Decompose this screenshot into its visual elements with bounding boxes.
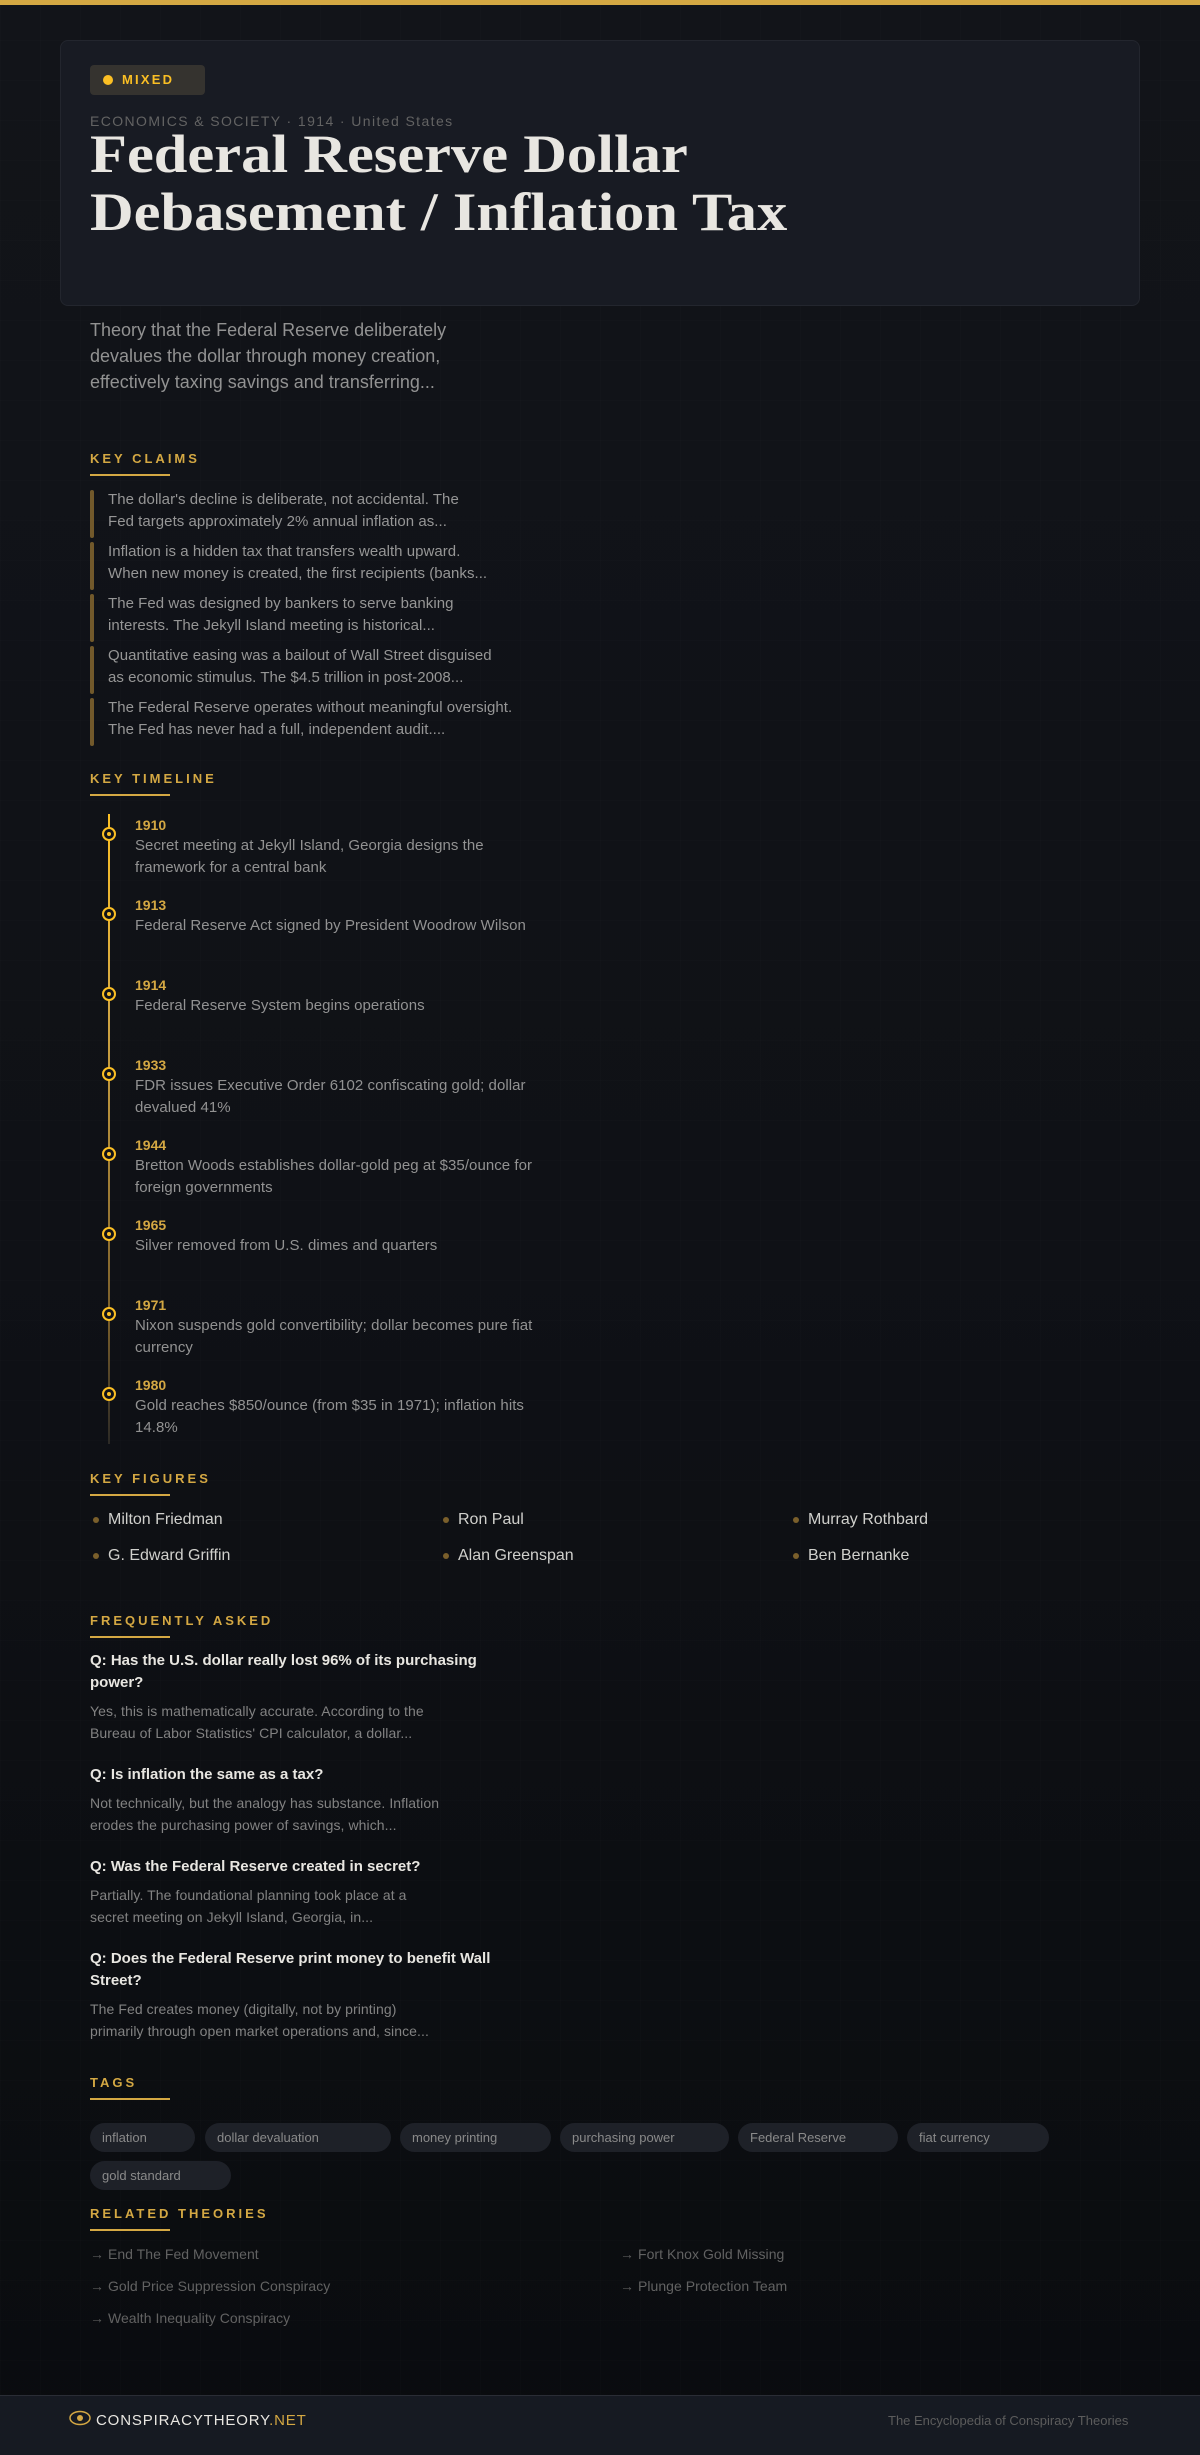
FAQ item 1: Yes, this is mathematically accurate. According to the	[90, 1703, 424, 1719]
event 1944	[102, 1137, 532, 1196]
title: Federal Reserve Dollar	[90, 124, 688, 184]
event 1980: 14.8%	[135, 1419, 178, 1436]
claim 5: The Federal Reserve operates without meaningful oversight.	[108, 699, 512, 716]
tag	[90, 2123, 195, 2152]
claim 1: The dollar's decline is deliberate, not accidental. The	[108, 491, 459, 508]
FAQ item 2	[90, 1766, 439, 1833]
footer tagline: The Encyclopedia of Conspiracy Theories	[888, 2413, 1128, 2428]
tag: Federal Reserve	[750, 2130, 846, 2145]
event 1980: Gold reaches $850/ounce (from $35 in 1971); inflation hits	[135, 1397, 524, 1414]
panel: hero header	[60, 40, 1140, 306]
tag: dollar devaluation	[217, 2130, 319, 2145]
FAQ item 3: Q: Was the Federal Reserve created in secret?	[90, 1858, 420, 1875]
event 1971	[102, 1297, 532, 1356]
event 1913: 1913	[135, 897, 166, 913]
figure: Ben Bernanke: Ben Bernanke	[808, 1547, 909, 1564]
event 1933: FDR issues Executive Order 6102 confiscating gold; dollar	[135, 1077, 526, 1094]
FAQ item 1	[90, 1652, 477, 1741]
event 1965: 1965	[135, 1217, 166, 1233]
claim 5: The Fed has never had a full, independent audit....	[108, 721, 445, 738]
heading: related theories: RELATED THEORIES	[90, 2206, 268, 2221]
event 1980	[102, 1377, 524, 1436]
claim 2: Inflation is a hidden tax that transfers wealth upward.	[108, 543, 460, 560]
FAQ item 2: Q: Is inflation the same as a tax?	[90, 1766, 323, 1783]
FAQ item 3: secret meeting on Jekyll Island, Georgia, in...	[90, 1909, 373, 1925]
footer	[0, 2395, 1200, 2455]
heading: key claims: KEY CLAIMS	[90, 451, 200, 466]
tag	[738, 2123, 898, 2152]
title	[90, 124, 787, 242]
event 1913	[102, 897, 526, 934]
tag	[560, 2123, 729, 2152]
FAQ item 4: primarily through open market operations and, since...	[90, 2023, 429, 2039]
figure: Alan Greenspan: Alan Greenspan	[458, 1547, 574, 1564]
claim 3: interests. The Jekyll Island meeting is historical...	[108, 617, 435, 634]
timeline	[102, 814, 532, 1444]
badge: mixed verdict	[90, 65, 205, 95]
tag: money printing	[412, 2130, 497, 2145]
top accent bar	[0, 0, 1200, 5]
claim 4	[90, 646, 492, 694]
event 1914: Federal Reserve System begins operations	[135, 997, 425, 1014]
FAQ item 4: The Fed creates money (digitally, not by printing)	[90, 2001, 396, 2017]
summary text: devalues the dollar through money creation,	[90, 346, 440, 366]
event 1913: Federal Reserve Act signed by President Woodrow Wilson	[135, 917, 526, 934]
tag	[400, 2123, 551, 2152]
brand name: CONSPIRACYTHEORY.NET	[96, 2412, 307, 2429]
tag: inflation	[102, 2130, 147, 2145]
claim 1	[90, 490, 459, 538]
figure: Murray Rothbard: Murray Rothbard	[808, 1511, 928, 1528]
event 1971: 1971	[135, 1297, 166, 1313]
event 1910: framework for a central bank	[135, 859, 326, 876]
claim 4: Quantitative easing was a bailout of Wall Street disguised	[108, 647, 492, 664]
claim 3	[90, 594, 453, 642]
tag: purchasing power	[572, 2130, 675, 2145]
FAQ item 4	[90, 1950, 490, 2039]
event 1965: Silver removed from U.S. dimes and quarters	[135, 1237, 437, 1254]
event 1910: Secret meeting at Jekyll Island, Georgia designs the	[135, 837, 484, 854]
event 1910	[102, 817, 484, 876]
tag	[907, 2123, 1049, 2152]
event 1910: 1910	[135, 817, 166, 833]
icon: badge dot	[103, 75, 113, 85]
claim 4: as economic stimulus. The $4.5 trillion in post-2008...	[108, 669, 463, 686]
claim 3: The Fed was designed by bankers to serve banking	[108, 595, 453, 612]
tag list	[90, 2123, 1049, 2190]
FAQ item 1: power?	[90, 1674, 143, 1691]
claim 2	[90, 542, 487, 590]
event 1914: 1914	[135, 977, 166, 993]
summary text: effectively taxing savings and transferring...	[90, 372, 435, 392]
timeline rail	[108, 814, 110, 1444]
event 1944: Bretton Woods establishes dollar-gold peg at $35/ounce for	[135, 1157, 532, 1174]
related link: → Plunge Protection Team	[620, 2278, 787, 2294]
event 1933: devalued 41%	[135, 1099, 231, 1116]
tag	[205, 2123, 391, 2152]
claim 1: Fed targets approximately 2% annual inflation as...	[108, 513, 447, 530]
heading: tags: TAGS	[90, 2075, 137, 2090]
event 1971: currency	[135, 1339, 193, 1356]
event 1971: Nixon suspends gold convertibility; dollar becomes pure fiat	[135, 1317, 532, 1334]
FAQ item 4: Street?	[90, 1972, 142, 1989]
FAQ item 3: Partially. The foundational planning took place at a	[90, 1887, 407, 1903]
tag: fiat currency	[919, 2130, 990, 2145]
panel: key figures	[93, 1511, 928, 1564]
panel: key claims	[90, 490, 512, 746]
figure: G. Edward Griffin: G. Edward Griffin	[108, 1547, 230, 1564]
related link: → End The Fed Movement	[90, 2246, 259, 2262]
FAQ item 2: Not technically, but the analogy has substance. Inflation	[90, 1795, 439, 1811]
event 1965	[102, 1217, 437, 1254]
related theories list	[90, 2246, 787, 2326]
FAQ item 2: erodes the purchasing power of savings, which...	[90, 1817, 397, 1833]
related link: → Gold Price Suppression Conspiracy	[90, 2278, 330, 2294]
category line: ECONOMICS & SOCIETY · 1914 · United States	[90, 113, 454, 129]
badge label: MIXED	[122, 72, 174, 87]
event 1944: 1944	[135, 1137, 166, 1153]
claim 5	[90, 698, 512, 746]
FAQ item 3	[90, 1858, 420, 1925]
heading: key figures: KEY FIGURES	[90, 1471, 211, 1486]
FAQ item 1: Q: Has the U.S. dollar really lost 96% of its purchasing	[90, 1652, 477, 1669]
event 1980: 1980	[135, 1377, 166, 1393]
claim 2: When new money is created, the first recipients (banks...	[108, 565, 487, 582]
icon: eye logo	[69, 2410, 91, 2426]
summary text	[90, 320, 446, 392]
heading: frequently asked: FREQUENTLY ASKED	[90, 1613, 273, 1628]
title: Debasement / Inflation Tax	[90, 182, 787, 242]
figure: Ron Paul: Ron Paul	[458, 1511, 524, 1528]
figure: Milton Friedman: Milton Friedman	[108, 1511, 223, 1528]
event 1933	[102, 1057, 526, 1116]
FAQ item 4: Q: Does the Federal Reserve print money to benefit Wall	[90, 1950, 490, 1967]
heading: key timeline: KEY TIMELINE	[90, 771, 217, 786]
summary text: Theory that the Federal Reserve deliberately	[90, 320, 446, 340]
FAQ item 1: Bureau of Labor Statistics' CPI calculator, a dollar...	[90, 1725, 412, 1741]
event 1944: foreign governments	[135, 1179, 273, 1196]
event 1933: 1933	[135, 1057, 166, 1073]
tag	[90, 2161, 231, 2190]
related link: → Wealth Inequality Conspiracy	[90, 2310, 290, 2326]
related link: → Fort Knox Gold Missing	[620, 2246, 784, 2262]
event 1914	[102, 977, 425, 1014]
tag: gold standard	[102, 2168, 181, 2183]
